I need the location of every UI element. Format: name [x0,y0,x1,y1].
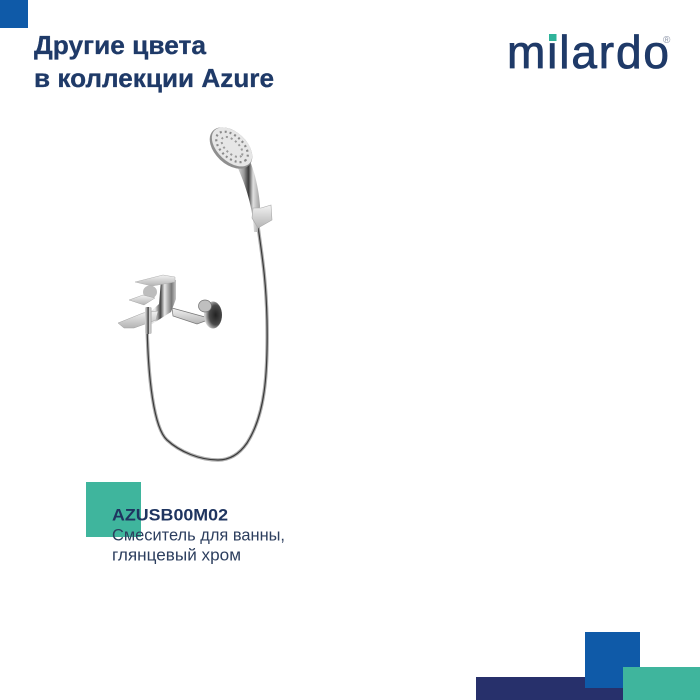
product caption: Смеситель для ванны, [112,526,285,544]
spout [118,311,158,328]
hose nut [145,307,152,334]
corner square: top left [0,0,28,28]
small knob [143,286,157,298]
title: Другие цвета [34,30,207,60]
title [34,30,274,93]
wall arm [172,308,208,324]
hand shower head [202,119,260,177]
diverter lever [129,295,155,305]
wall bracket [252,205,272,228]
product image: shower faucet set [118,119,272,460]
teal accent square [86,482,141,537]
corner blocks: bottom right [476,632,700,700]
mixer body [146,280,176,324]
product caption [112,506,285,564]
logo: milardo: ® [663,35,671,46]
wall nut [198,300,212,312]
title: в коллекции Azure [34,63,274,93]
logo: milardo: milardo [507,26,669,78]
wall flange [204,302,222,328]
top lever [135,275,175,286]
product caption: глянцевый хром [112,546,241,564]
hand shower handle [237,161,260,232]
hose [147,226,267,460]
product caption: AZUSB00M02 [112,506,228,524]
